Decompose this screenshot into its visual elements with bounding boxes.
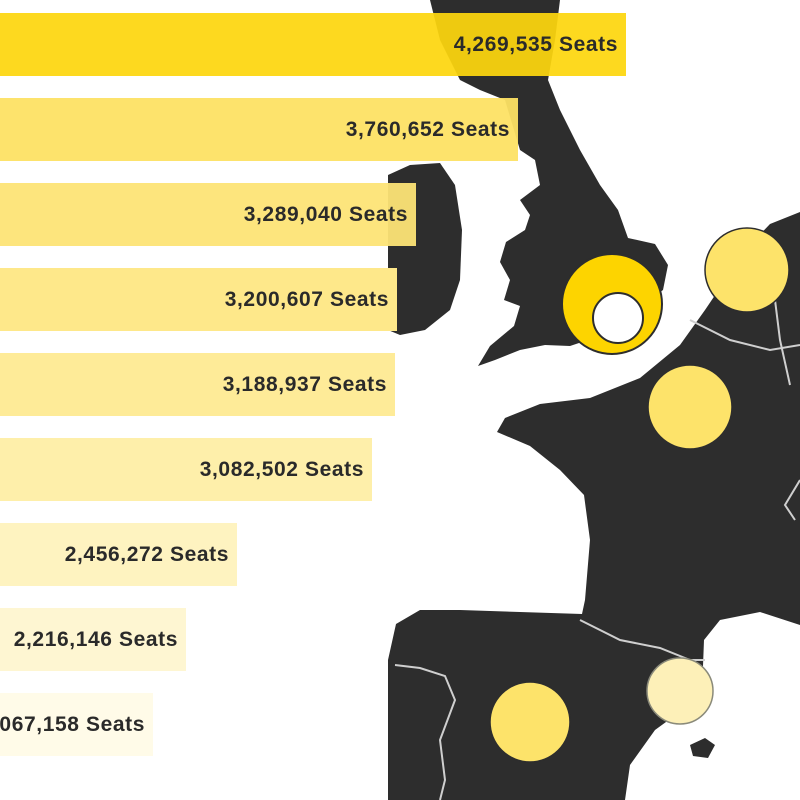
- land: Ireland: [388, 163, 462, 335]
- bar 5: 3,188,937 Seats: [223, 372, 387, 396]
- bar 9: [0, 693, 153, 756]
- circle: Amsterdam: [705, 228, 789, 312]
- bar 3: 3,289,040 Seats: [244, 202, 408, 226]
- bar 5: [0, 353, 395, 416]
- circle: London: [562, 254, 662, 354]
- bar 4: [0, 268, 397, 331]
- bar 2: [0, 98, 518, 161]
- bar 7: [0, 523, 237, 586]
- bar 3: [0, 183, 416, 246]
- circle: Madrid: [490, 682, 570, 762]
- bar 4: 3,200,607 Seats: [225, 288, 389, 310]
- land: Great Britain: [430, 0, 668, 366]
- bar 6: [0, 438, 372, 501]
- bar 1: [0, 13, 626, 76]
- bar 8: [0, 608, 186, 671]
- bar 2: 3,760,652 Seats: [346, 118, 510, 140]
- bar 1: 4,269,535 Seats: [454, 32, 618, 56]
- bar 8: 2,216,146 Seats: [14, 628, 178, 650]
- land: Balearic islands: [690, 738, 715, 758]
- circle: Barcelona: [647, 658, 713, 724]
- land: continent: [388, 212, 800, 800]
- borders: [395, 300, 800, 800]
- bar 7: 2,456,272 Seats: [65, 542, 229, 566]
- circle: Paris: [648, 365, 732, 449]
- bar 6: 3,082,502 Seats: [200, 458, 364, 480]
